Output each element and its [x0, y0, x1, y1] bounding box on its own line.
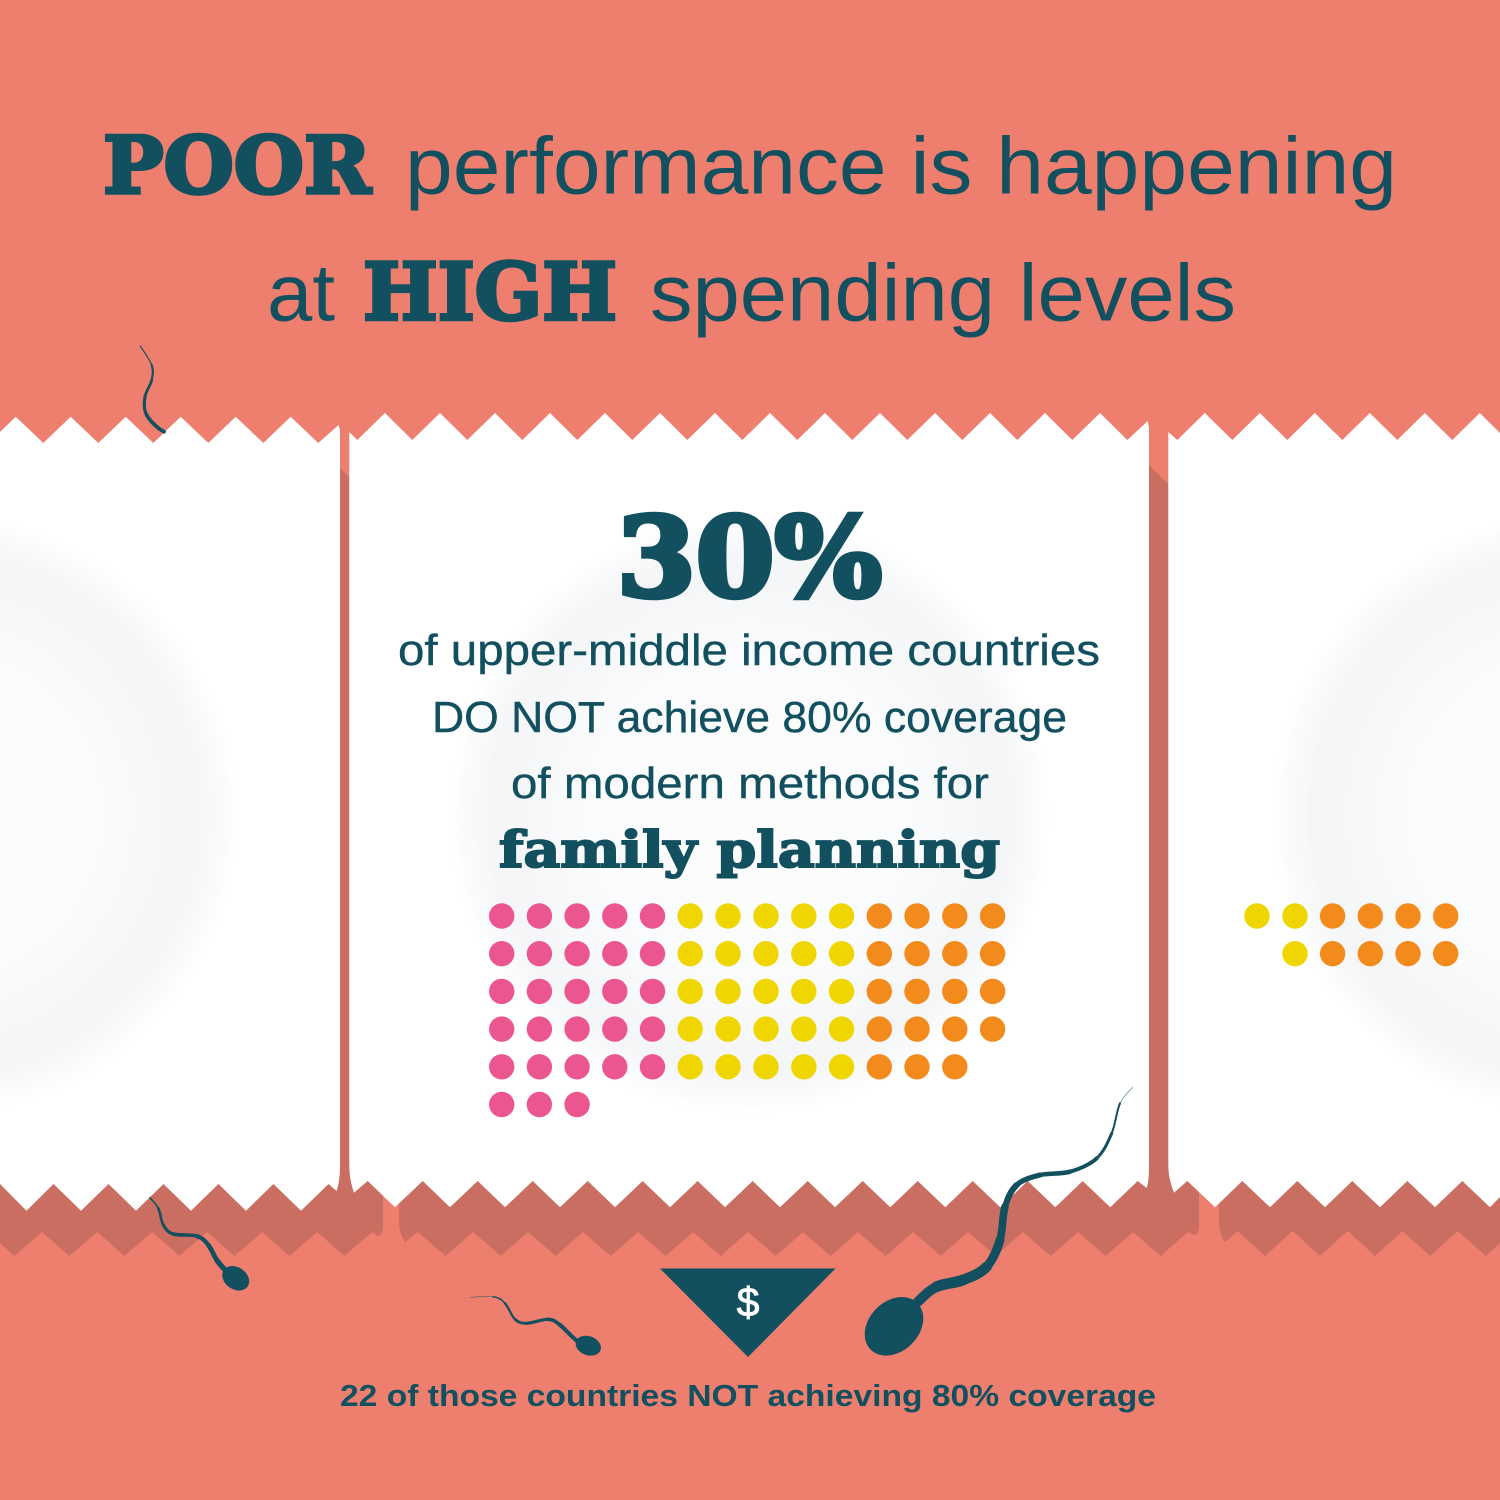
title word: HIGH: HIGH: [363, 246, 617, 338]
pink dots: [489, 903, 665, 1117]
orange dots: [867, 903, 1005, 1080]
dot chart: right panel: [1244, 903, 1458, 966]
icon: sperm tail top: [140, 346, 164, 432]
body line 3: of modern methods for: [511, 759, 989, 808]
dot chart: middle panel: [489, 903, 1005, 1117]
body line 1: of upper-middle income countries: [398, 626, 1100, 675]
title text: performance is happening: performance is happening: [405, 122, 1397, 212]
icon: sperm bottom left: [150, 1198, 254, 1296]
shadow: middle ticket: [399, 465, 1199, 1256]
shadow: left ticket: [0, 468, 383, 1256]
yellow dots right: [1244, 903, 1308, 966]
panel shadows: [0, 465, 1500, 1256]
icon: sperm bottom middle: [470, 1296, 604, 1359]
title text: spending levels: spending levels: [650, 248, 1236, 338]
white zigzag panels: [0, 413, 1500, 1211]
main statistic: [398, 493, 1100, 879]
glow: left: [0, 515, 238, 1115]
orange dots right: [1320, 903, 1458, 966]
title text: at: at: [267, 248, 335, 338]
dollar sign: $: [737, 1279, 760, 1325]
big number: 30%: 30%: [617, 493, 882, 622]
shadow: right ticket: [1219, 1100, 1500, 1256]
icon: down triangle with dollar: [660, 1268, 836, 1357]
glow: middle: [450, 515, 1050, 1115]
body line 4: family planning: family planning: [499, 820, 1000, 879]
soft circular glows: [0, 515, 1500, 1115]
panel: right: [1168, 413, 1500, 1207]
icon: sperm large: [853, 1087, 1133, 1367]
body line 2: DO NOT achieve 80% coverage: [432, 693, 1067, 742]
title word: POOR: POOR: [103, 119, 372, 212]
panel: left: [0, 417, 340, 1211]
glow: right: [1272, 515, 1500, 1115]
title: [103, 119, 1397, 338]
panel: middle: [349, 413, 1149, 1207]
yellow dots: [678, 903, 854, 1080]
caption: 22 of those countries NOT achieving 80% coverage: [340, 1378, 1156, 1413]
